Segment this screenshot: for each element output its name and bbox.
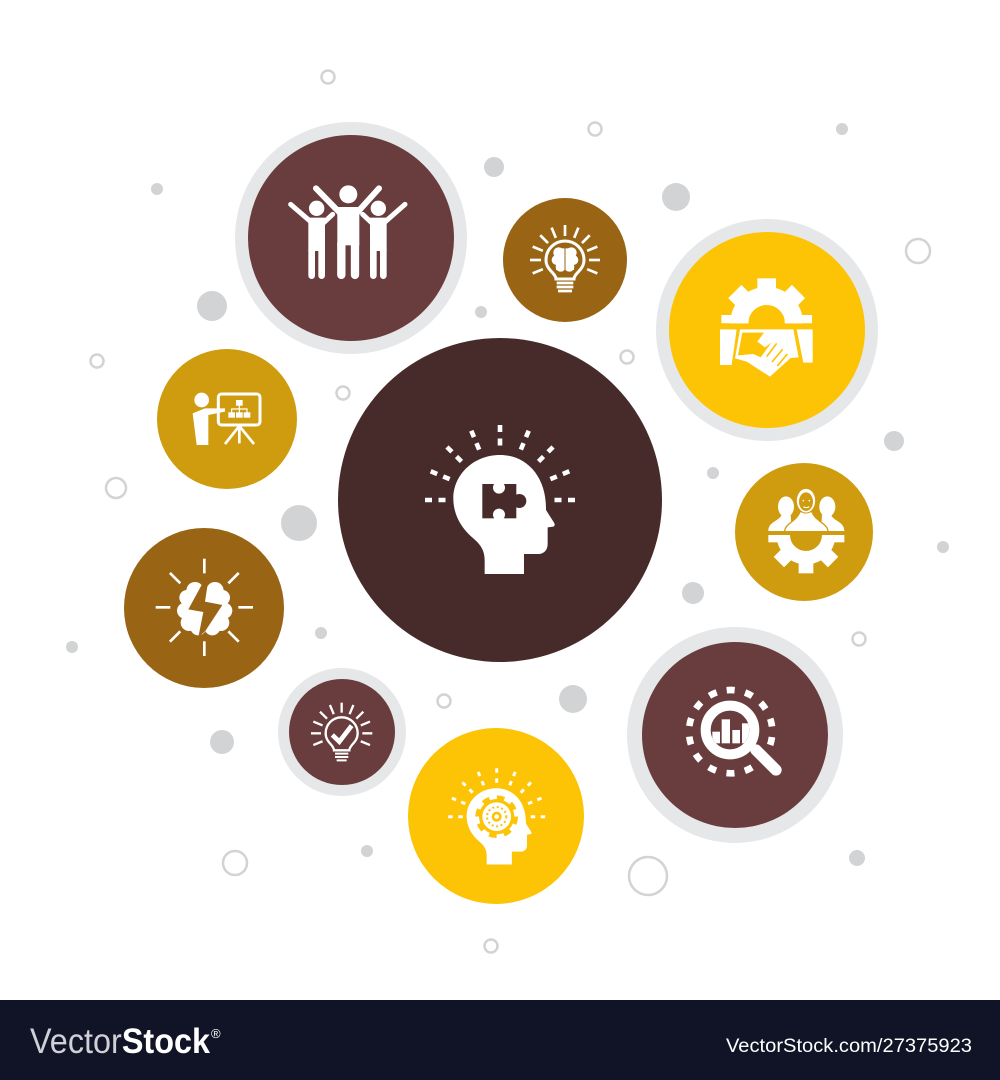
registered mark: ® [211, 1026, 221, 1041]
footer bar [0, 1000, 1000, 1080]
icon: gear inside head [477, 797, 516, 836]
icon: magnifier with bar chart [685, 686, 776, 777]
panel: gear head bubble [408, 728, 584, 904]
icon: brain with lightning bolt [156, 559, 253, 656]
background: scattered filled dots [66, 123, 949, 866]
icon: presenter at flip board [193, 393, 260, 445]
footer logo: VectorStock [30, 1022, 210, 1061]
panel: brain lightbulb bubble [503, 198, 627, 322]
panel: handshake gear bubble [656, 219, 878, 441]
icon part: hand details [738, 333, 787, 366]
icon: lightbulb with check mark [311, 703, 372, 760]
panel: brain bolt bubble [124, 528, 284, 688]
panel: check lightbulb bubble [278, 668, 406, 796]
icon: three people with raised arms [291, 185, 405, 276]
panel: magnifier bubble [627, 627, 843, 843]
icon: head silhouette [467, 788, 531, 864]
icon: team above half gear [768, 488, 844, 573]
panel: presenter bubble [157, 349, 297, 489]
icon: radiating dashes [448, 768, 545, 817]
panel: people gear bubble [735, 463, 873, 601]
icon: gear with handshake [720, 278, 813, 377]
icon part: half gear [721, 278, 812, 324]
icon: lightbulb with brain [530, 225, 600, 291]
icon part: half gear [768, 535, 844, 574]
icon part: left and right side blocks [720, 329, 813, 377]
panel: center bubble with puzzle head [338, 338, 662, 662]
icon: radiating dashes [425, 425, 575, 500]
footer image id: VectorStock.com/27375923 [726, 1036, 972, 1057]
background: scattered ring dots [90, 70, 930, 952]
panel: three people bubble [235, 122, 467, 354]
icon: head with puzzle piece [453, 455, 555, 574]
